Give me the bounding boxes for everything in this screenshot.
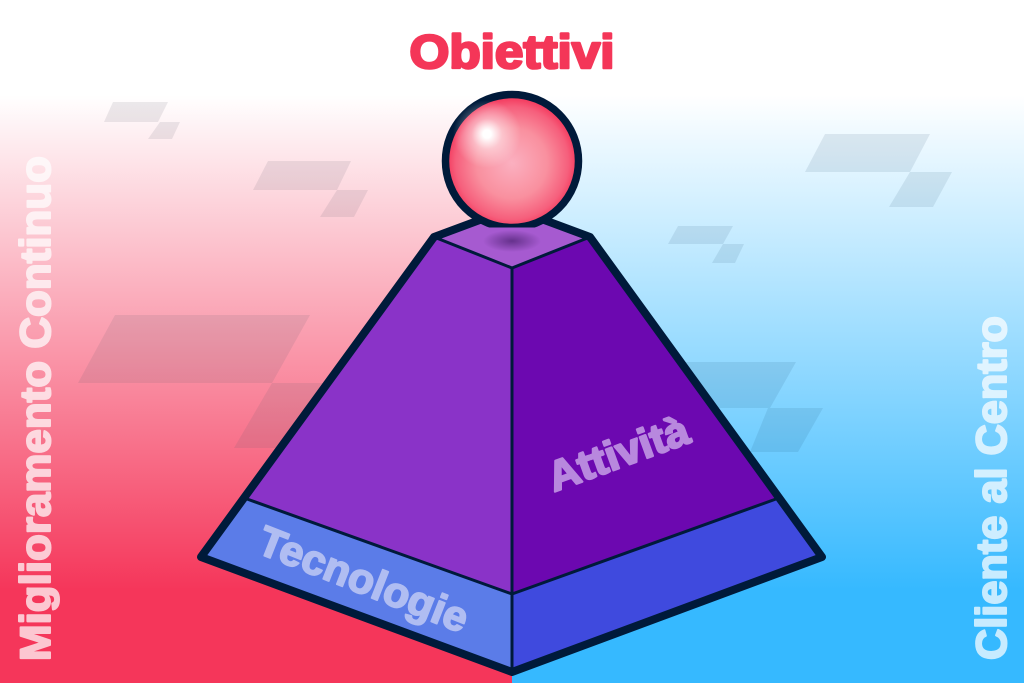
label: Attività: Attività bbox=[541, 406, 696, 500]
background: right blue gradient bbox=[512, 0, 1024, 683]
pyramid outline bbox=[201, 208, 822, 672]
sphere highlight bbox=[454, 102, 518, 164]
pyramid top face bbox=[434, 208, 590, 268]
side label: Miglioramento Continuo: Miglioramento Continuo bbox=[12, 156, 60, 661]
decorative parallelograms right bbox=[660, 134, 952, 452]
sphere bbox=[446, 94, 578, 228]
pyramid bbox=[201, 208, 822, 672]
right band: Tecnologie level bbox=[512, 499, 822, 672]
right face: Attività level bbox=[512, 237, 776, 594]
label: Tecnologie: Tecnologie bbox=[252, 517, 475, 642]
pyramid inner edges bbox=[247, 237, 776, 672]
decorative parallelograms left bbox=[78, 102, 368, 448]
left band: Tecnologie level bbox=[201, 499, 512, 672]
left face: Attività level bbox=[247, 237, 512, 594]
background: left red gradient bbox=[0, 0, 512, 683]
title: Obiettivi bbox=[410, 25, 614, 78]
side label: Cliente al Centro: Cliente al Centro bbox=[968, 316, 1016, 660]
top face shadow bbox=[483, 230, 541, 252]
